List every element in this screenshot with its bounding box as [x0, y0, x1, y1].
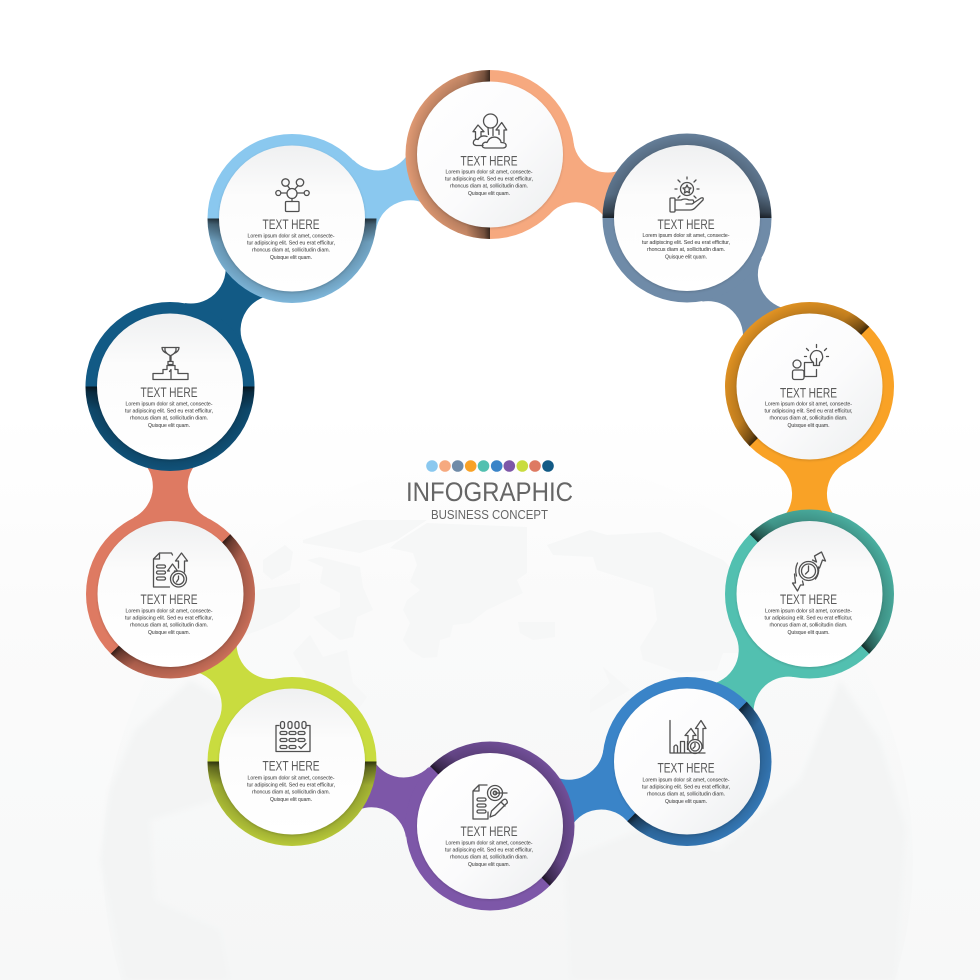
- panel: coral step: [86, 510, 290, 714]
- heading: TEXT HERE: [140, 592, 198, 607]
- icon: bar chart with clock: [670, 720, 706, 754]
- body text: [125, 608, 213, 636]
- body text: [445, 840, 533, 868]
- body text: tur adipiscing elit. Sed eu erat efficitur,: [764, 616, 853, 622]
- body text: tur adipiscing elit. Sed eu erat efficitur,: [247, 782, 335, 788]
- body text: Quisque elit quam.: [665, 799, 707, 805]
- body text: Lorem ipsum dolor sit amet, consecte-: [765, 608, 852, 614]
- icon: hand holding star: [670, 177, 703, 212]
- body text: [125, 402, 213, 429]
- heading: TEXT HERE: [780, 592, 837, 607]
- heading: TEXT HERE: [780, 386, 837, 400]
- icon: document with target and pencil: [473, 785, 507, 819]
- icon: trophy on podium: [153, 348, 188, 380]
- body text: tur adipiscing elit. Sed eu erat efficitur,: [764, 408, 853, 414]
- body text: [247, 776, 335, 803]
- heading: TEXT HERE: [140, 385, 198, 400]
- body text: Quisque elit quam.: [148, 630, 190, 636]
- body text: rhoncus diam at, sollicitudin diam.: [252, 248, 330, 254]
- body text: rhoncus diam at, sollicitudin diam.: [770, 416, 848, 422]
- body text: Quisque elit quam.: [665, 254, 707, 260]
- body text: rhoncus diam at, sollicitudin diam.: [770, 623, 848, 629]
- body text: Quisque elit quam.: [270, 255, 312, 261]
- body text: Lorem ipsum dolor sit amet, consecte-: [126, 608, 213, 614]
- body text: tur adipiscing elit. Sed eu erat efficitur,: [445, 176, 533, 182]
- heading: TEXT HERE: [460, 154, 518, 168]
- connector: coral to navy: [133, 456, 207, 518]
- connector: orange to slate: [551, 142, 632, 232]
- body text: Lorem ipsum dolor sit amet, consecte-: [248, 776, 335, 782]
- panel: orange step: [406, 70, 574, 239]
- heading: TEXT HERE: [262, 217, 320, 232]
- icon: clock with up and down arrows: [792, 552, 826, 591]
- heading: TEXT HERE: [658, 217, 714, 232]
- body text: Quisque elit quam.: [788, 423, 830, 429]
- body text: Lorem ipsum dolor sit amet, consecte-: [446, 170, 533, 176]
- icon: network nodes: [276, 179, 309, 212]
- body text: tur adipiscing elit. Sed eu erat efficitur,: [247, 240, 335, 246]
- body text: rhoncus diam at, sollicitudin diam.: [450, 855, 528, 861]
- panel: blue step: [602, 677, 807, 881]
- globe and world map backdrop: [100, 455, 913, 980]
- connector: blue to purple: [545, 750, 626, 839]
- body text: Lorem ipsum dolor sit amet, consecte-: [642, 778, 730, 784]
- body text: rhoncus diam at, sollicitudin diam.: [130, 623, 208, 629]
- body text: rhoncus diam at, sollicitudin diam.: [647, 792, 725, 798]
- colour dots legend: [426, 460, 554, 472]
- icon: document with clock and arrows: [154, 553, 188, 587]
- icon: person with light bulb: [792, 344, 828, 380]
- body text: Quisque elit quam.: [468, 862, 510, 868]
- body text: Quisque elit quam.: [468, 191, 510, 197]
- connector: sky to orange: [353, 141, 434, 230]
- body text: tur adipiscing elit. Sed eu erat efficitur,: [642, 240, 730, 246]
- body text: rhoncus diam at, sollicitudin diam.: [252, 790, 330, 796]
- panel: purple step: [406, 706, 610, 910]
- connector: slate to amber: [702, 258, 798, 351]
- subtitle: BUSINESS CONCEPT: [431, 508, 548, 522]
- body text: Lorem ipsum dolor sit amet, consecte-: [248, 234, 335, 240]
- connector: amber to teal: [772, 462, 847, 524]
- icon: calendar: [276, 722, 310, 752]
- body text: Quisque elit quam.: [148, 423, 190, 429]
- panel: amber step: [690, 267, 894, 471]
- body text: tur adipiscing elit. Sed eu erat efficitur,: [642, 784, 730, 790]
- body text: rhoncus diam at, sollicitudin diam.: [450, 184, 528, 190]
- body text: [445, 170, 533, 197]
- body text: [764, 608, 853, 636]
- body text: [642, 233, 730, 260]
- panel: lime step: [208, 677, 376, 846]
- panel: slate step: [602, 134, 772, 302]
- body text: [247, 234, 335, 261]
- panel: navy step: [86, 302, 254, 471]
- heading: TEXT HERE: [658, 760, 714, 776]
- body text: tur adipiscing elit. Sed eu erat efficitur,: [125, 408, 213, 414]
- body text: Lorem ipsum dolor sit amet, consecte-: [642, 233, 730, 239]
- body text: Lorem ipsum dolor sit amet, consecte-: [126, 402, 213, 408]
- body text: rhoncus diam at, sollicitudin diam.: [130, 416, 208, 422]
- connector: navy to sky: [185, 253, 281, 347]
- connector: purple to lime: [347, 748, 429, 837]
- panel: teal step: [725, 474, 929, 678]
- body text: Quisque elit quam.: [270, 797, 312, 803]
- body text: rhoncus diam at, sollicitudin diam.: [647, 247, 725, 253]
- heading: TEXT HERE: [460, 824, 518, 839]
- body text: Lorem ipsum dolor sit amet, consecte-: [446, 840, 533, 846]
- icon: magnifier arrows over clouds: [473, 114, 507, 148]
- title: INFOGRAPHIC: [406, 477, 573, 507]
- heading: TEXT HERE: [262, 758, 320, 774]
- body text: tur adipiscing elit. Sed eu erat efficitur,: [125, 616, 213, 622]
- panel: sky step: [208, 134, 376, 303]
- body text: tur adipiscing elit. Sed eu erat efficitur,: [445, 848, 533, 854]
- body text: [642, 778, 730, 805]
- body text: Lorem ipsum dolor sit amet, consecte-: [765, 402, 852, 408]
- connector: lime to coral: [181, 629, 278, 722]
- body text: Quisque elit quam.: [788, 630, 830, 636]
- connector: teal to blue: [698, 634, 795, 727]
- body text: [764, 402, 853, 429]
